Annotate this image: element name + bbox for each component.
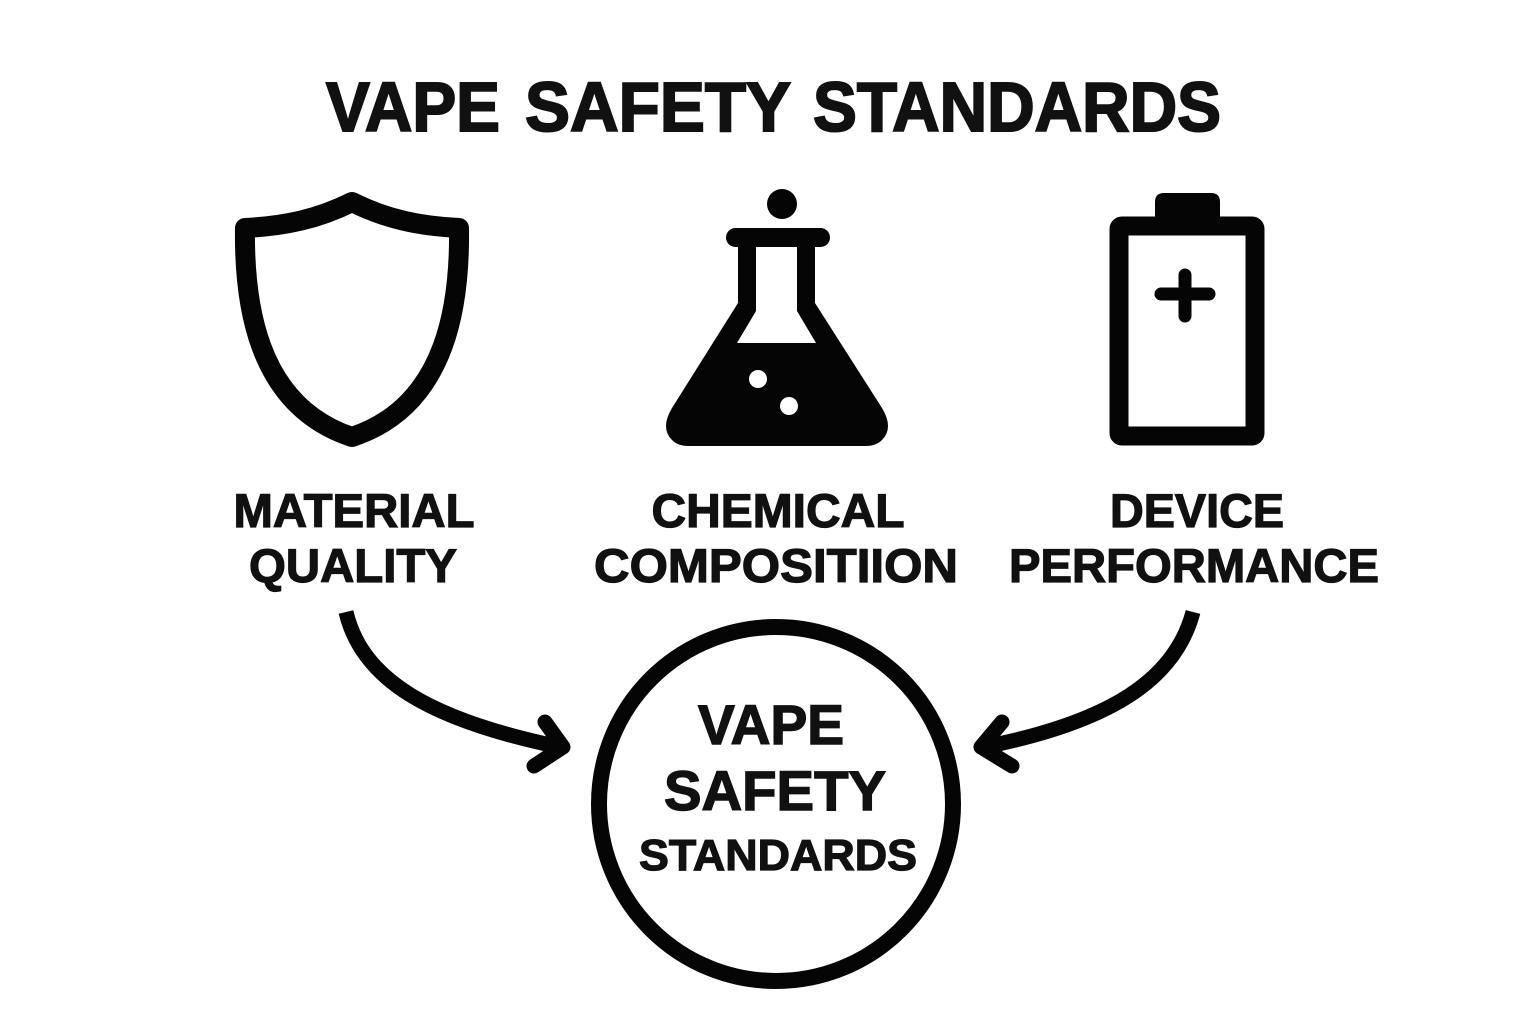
icon: flask bbox=[666, 189, 888, 446]
label: material quality: MATERIAL bbox=[234, 484, 474, 537]
title: VAPE bbox=[326, 68, 500, 146]
label: chemical composition: CHEMICAL bbox=[652, 484, 904, 537]
circle badge: STANDARDS bbox=[639, 831, 917, 880]
title: SAFETY bbox=[525, 68, 791, 146]
circle badge: SAFETY bbox=[664, 759, 886, 822]
label: material quality: QUALITY bbox=[249, 539, 457, 592]
label: device performance bbox=[1009, 484, 1379, 592]
circle badge: VAPE bbox=[698, 693, 844, 756]
arrow: left bbox=[346, 612, 563, 766]
label: device performance: DEVICE bbox=[1110, 484, 1284, 537]
label: material quality bbox=[234, 484, 474, 592]
arrow: right bbox=[981, 612, 1193, 766]
label: device performance: PERFORMANCE bbox=[1009, 539, 1379, 592]
label: chemical composition: COMPOSITIION bbox=[594, 539, 958, 592]
label: chemical composition bbox=[594, 484, 958, 592]
title: STANDARDS bbox=[813, 68, 1221, 146]
title bbox=[326, 68, 1221, 146]
icon: battery bbox=[1119, 193, 1255, 436]
icon: shield bbox=[245, 202, 459, 437]
circle badge bbox=[599, 627, 953, 981]
